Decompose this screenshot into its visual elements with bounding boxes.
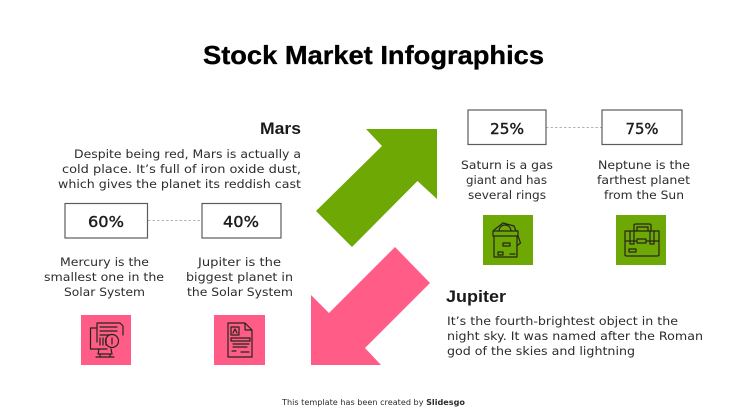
text block: Jupiter description	[447, 314, 703, 358]
title: Stock Market Infographics	[203, 40, 544, 70]
text block: Mars description	[58, 147, 302, 191]
text block: Saturn: giant and has	[466, 173, 547, 187]
panel: Mars	[58, 119, 302, 191]
text block: Mercury: Mercury is the	[60, 255, 149, 269]
heading: Jupiter: Jupiter	[446, 287, 506, 306]
arrow: pink down	[311, 247, 430, 365]
icon: resume document	[214, 315, 265, 365]
stat: 60%: 60%	[88, 213, 124, 231]
text block: Jupiter description: night sky. It was named after the Roman	[447, 329, 703, 343]
text block: Neptune: farthest planet	[597, 173, 691, 187]
text block: Jupiter: the Solar System	[187, 285, 293, 299]
icon: money bag	[483, 215, 533, 265]
stat: 40%	[202, 204, 281, 238]
footer credit: This template has been created by Slidesgo	[281, 398, 465, 407]
panel: right statistics	[461, 110, 691, 265]
stat: 75%	[602, 110, 682, 144]
stat: 75%: 75%	[626, 120, 658, 138]
text block: Jupiter: Jupiter is the	[197, 255, 281, 269]
text block: Jupiter description: It’s the fourth-brightest object in the	[447, 314, 678, 328]
text block: Mercury: smallest one in the	[44, 270, 164, 284]
panel: left statistics	[44, 204, 293, 365]
arrow: green up	[316, 129, 437, 247]
text block: Saturn: Saturn is a gas	[461, 158, 553, 172]
text block: Neptune: from the Sun	[604, 188, 684, 202]
heading: Mars: Mars	[260, 119, 301, 138]
stat: 25%	[468, 110, 546, 144]
text block: Jupiter: biggest planet in	[186, 270, 293, 284]
text block: Jupiter	[186, 255, 293, 299]
text block: Mars description: which gives the planet its reddish cast	[58, 177, 302, 191]
text block: Jupiter description: god of the skies and lightning	[447, 344, 635, 358]
text block: Saturn: several rings	[468, 188, 546, 202]
icon: monitor with dollar coin	[81, 315, 131, 365]
icon: briefcase	[616, 215, 666, 265]
text block: Saturn	[461, 158, 553, 202]
text block: Mars description: Despite being red, Mars is actually a	[74, 147, 301, 161]
stat: 40%: 40%	[223, 213, 259, 231]
text block: Neptune: Neptune is the	[598, 158, 690, 172]
panel: Jupiter	[446, 287, 703, 358]
text block: Mercury	[44, 255, 164, 299]
text block: Mars description: cold place. It’s full of iron oxide dust,	[62, 162, 301, 176]
stat: 60%	[65, 204, 148, 238]
text block: Neptune	[597, 158, 691, 202]
stat: 25%: 25%	[490, 120, 524, 138]
text block: Mercury: Solar System	[64, 285, 145, 299]
